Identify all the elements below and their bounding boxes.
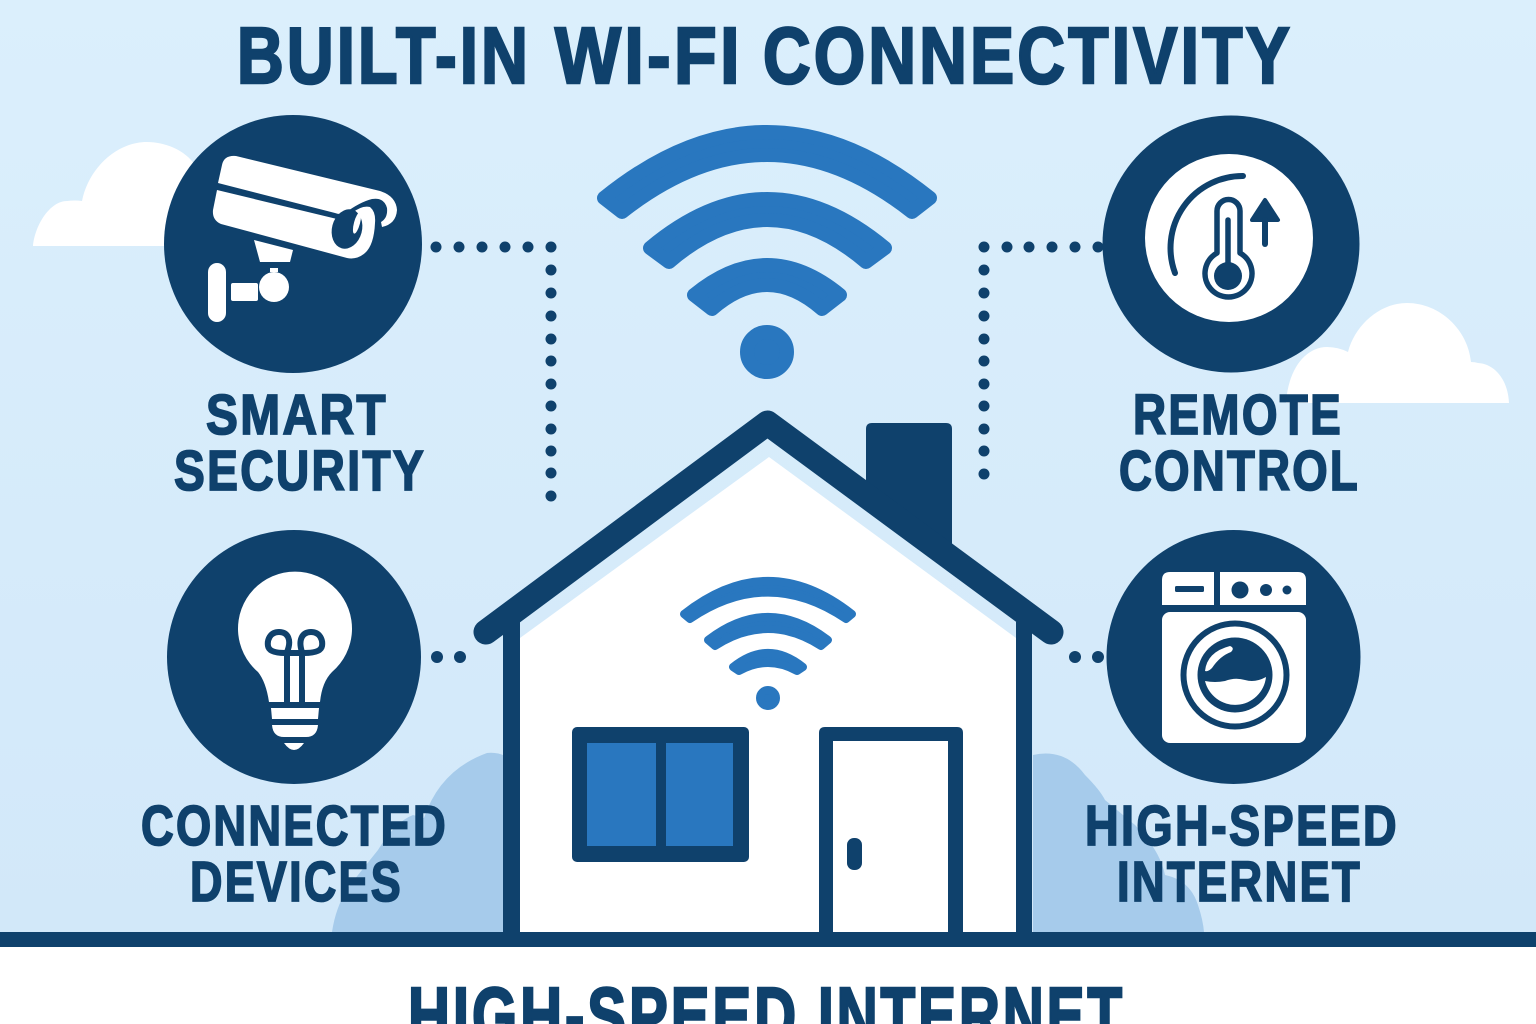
label: remote control: REMOTE — [1133, 383, 1343, 447]
label: high-speed internet: HIGH-SPEED — [1085, 794, 1399, 858]
label: high-speed internet: INTERNET — [1117, 850, 1362, 914]
title: WI-FI — [555, 11, 743, 100]
icon: light bulb — [238, 572, 352, 750]
icon: small wifi in house — [684, 581, 852, 706]
label: connected devices — [141, 794, 448, 914]
bottom white band — [0, 947, 1536, 1024]
connector: internet to house — [1069, 651, 1104, 663]
label: smart security — [174, 383, 426, 503]
panel: smart security icon — [164, 115, 422, 373]
icon: thermometer with arrow — [1171, 176, 1278, 297]
panel: high-speed internet icon — [1106, 530, 1360, 784]
label: connected devices: CONNECTED — [141, 794, 448, 858]
title — [237, 11, 1293, 100]
label: smart security: SMART — [206, 383, 388, 447]
walls — [503, 622, 1032, 935]
panel: connected devices icon — [167, 530, 421, 784]
chimney — [866, 423, 952, 560]
door — [819, 727, 963, 935]
label: high-speed internet — [1085, 794, 1399, 914]
connector: devices to house — [431, 651, 466, 663]
ground line — [0, 932, 1536, 947]
label: remote control — [1119, 383, 1360, 503]
connector: remote control to house — [978, 242, 1104, 480]
title: CONNECTIVITY — [763, 11, 1293, 100]
panel: remote control icon — [1102, 116, 1360, 372]
icon: large wifi symbol — [604, 132, 930, 372]
cloud: left — [33, 142, 195, 246]
icon: washing machine — [1162, 572, 1306, 743]
label: connected devices: DEVICES — [190, 850, 403, 914]
window — [572, 727, 749, 862]
icon: security camera — [208, 156, 397, 322]
house illustration — [486, 423, 1051, 935]
roof — [486, 423, 1051, 632]
title: BUILT-IN — [237, 11, 531, 100]
bushes behind house — [332, 753, 1204, 932]
connector: security to house — [430, 242, 556, 502]
label: remote control: CONTROL — [1119, 439, 1360, 503]
cloud: right — [1286, 303, 1509, 403]
label: smart security: SECURITY — [174, 439, 426, 503]
